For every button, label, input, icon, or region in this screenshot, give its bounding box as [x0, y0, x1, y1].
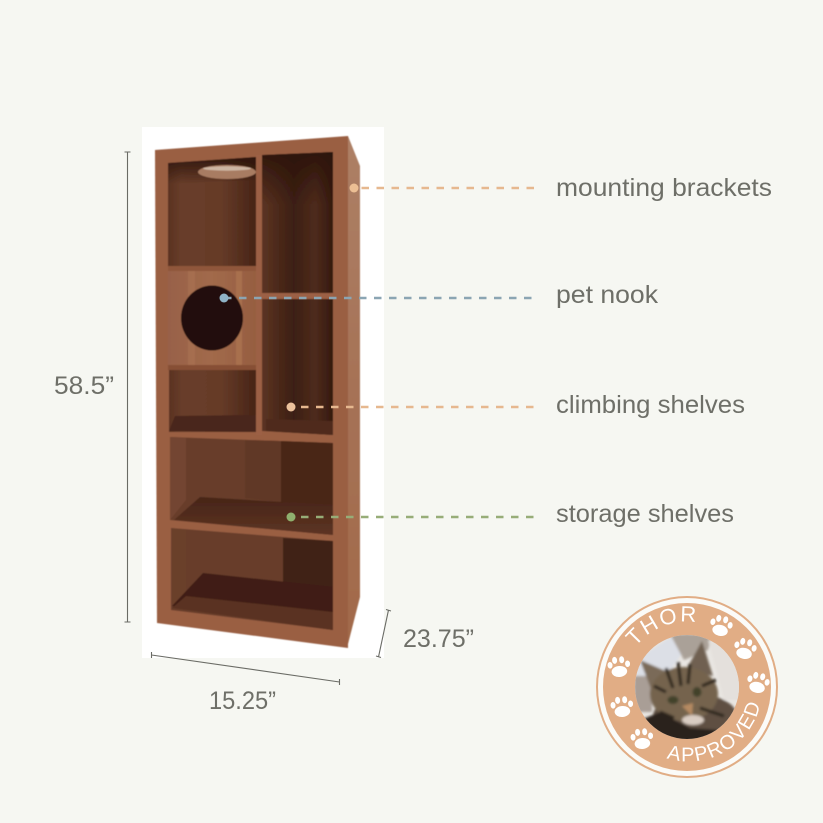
right shelf — [262, 293, 333, 299]
callout: mounting brackets — [350, 174, 772, 202]
callout: climbing shelves: climbing shelves — [556, 391, 745, 419]
dimension: depth: 23.75” — [403, 625, 474, 653]
middle storage compartment — [170, 437, 333, 535]
bottom storage compartment — [171, 528, 333, 630]
upper right cubby — [262, 152, 333, 293]
product photo backdrop — [142, 127, 384, 658]
cat shelf cabinet — [155, 136, 360, 648]
pet nook panel — [168, 266, 256, 370]
badge text: APPROVED: APPROVED — [666, 702, 759, 762]
dimension: height: 58.5” — [54, 372, 114, 400]
dimension: width: 15.25” — [209, 687, 276, 715]
callout: pet nook — [220, 281, 659, 309]
cabinet front frame — [155, 136, 348, 648]
upper left cubby — [168, 157, 256, 266]
cabinet side face — [347, 136, 360, 648]
badge cat photo — [634, 634, 742, 742]
badge: Thor approved — [596, 596, 778, 778]
dimension: width — [152, 652, 340, 715]
badge paw prints — [607, 613, 771, 750]
callout: storage shelves: storage shelves — [556, 500, 734, 528]
callout: climbing shelves — [286, 391, 745, 419]
callout: pet nook: pet nook — [556, 281, 659, 309]
callout: storage shelves — [286, 500, 734, 528]
infographic canvas — [55, 127, 778, 778]
centre divider — [256, 155, 262, 435]
badge text: THOR: THOR — [624, 606, 695, 643]
callout: mounting brackets: mounting brackets — [556, 174, 772, 202]
dimension: height — [54, 152, 130, 622]
middle left cubby — [169, 370, 256, 432]
nook round hole — [181, 286, 243, 350]
dimension: depth — [376, 610, 474, 658]
lower right cubby — [262, 299, 333, 435]
